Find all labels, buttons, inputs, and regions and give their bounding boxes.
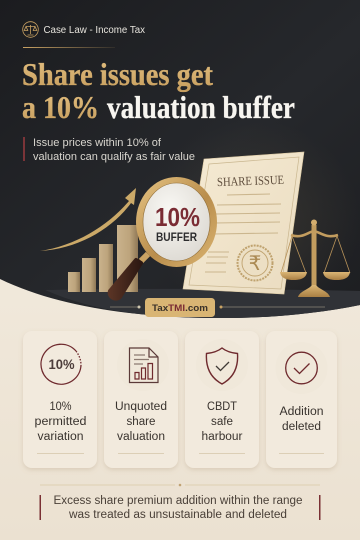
label: safe [211, 416, 233, 428]
label [280, 406, 324, 433]
label: harbour [202, 431, 243, 443]
card: unquoted share valuation [104, 331, 178, 468]
badge: case law category [23, 22, 145, 37]
icon: 10% dial: 10% [48, 356, 75, 372]
illustration: bar chart [68, 225, 138, 292]
lens [136, 177, 217, 267]
conclusion callout: was treated as unsustainable and deleted [68, 509, 287, 521]
label: valuation [117, 431, 165, 443]
subtitle: Issue prices within 10% of [33, 137, 162, 149]
title: Share issues get [22, 56, 213, 92]
arrow: growth [40, 188, 136, 251]
category label: Case Law - Income Tax [44, 25, 145, 36]
label [34, 401, 86, 443]
card: addition deleted [266, 331, 337, 468]
label [202, 401, 243, 443]
subtitle: valuation can qualify as fair value [33, 151, 195, 163]
icon: rupee seal [238, 246, 272, 280]
dark hero background [0, 0, 360, 318]
label: CBDT [207, 401, 237, 413]
label: Unquoted [115, 401, 167, 413]
icon: check circle [286, 352, 317, 384]
brand pill: TaxTMI.com [152, 303, 208, 313]
brand pill [145, 298, 215, 317]
card: 10% permitted variation [23, 331, 97, 468]
icon: document chart [130, 348, 158, 382]
subtitle [23, 137, 195, 163]
icon: rupee seal: ₹ [249, 251, 261, 275]
brand bar [110, 298, 325, 317]
illustration: magnifying glass: BUFFER [156, 230, 197, 244]
label: Addition [280, 406, 324, 418]
handle [141, 254, 148, 261]
icon: scales badge [23, 22, 38, 37]
title: a 10% [22, 89, 99, 125]
document heading: SHARE ISSUE [217, 173, 285, 189]
lens text: 10% [155, 202, 200, 232]
illustration: magnifying glass [110, 177, 217, 299]
stage platform [45, 289, 360, 318]
illustration: share issue document [183, 152, 304, 294]
label: share [126, 416, 156, 428]
label: permitted [34, 416, 86, 428]
conclusion callout: Excess share premium addition within the range [54, 495, 302, 507]
label [115, 401, 167, 443]
title [22, 56, 295, 125]
conclusion callout [40, 484, 320, 521]
label: variation [38, 431, 84, 443]
label: 10% [50, 401, 72, 413]
label: deleted [282, 421, 321, 433]
title: valuation buffer [107, 89, 295, 125]
document lines [205, 194, 281, 272]
illustration: balance scales [280, 220, 350, 297]
card: CBDT safe harbour [185, 331, 259, 468]
icon: shield check [206, 348, 238, 384]
